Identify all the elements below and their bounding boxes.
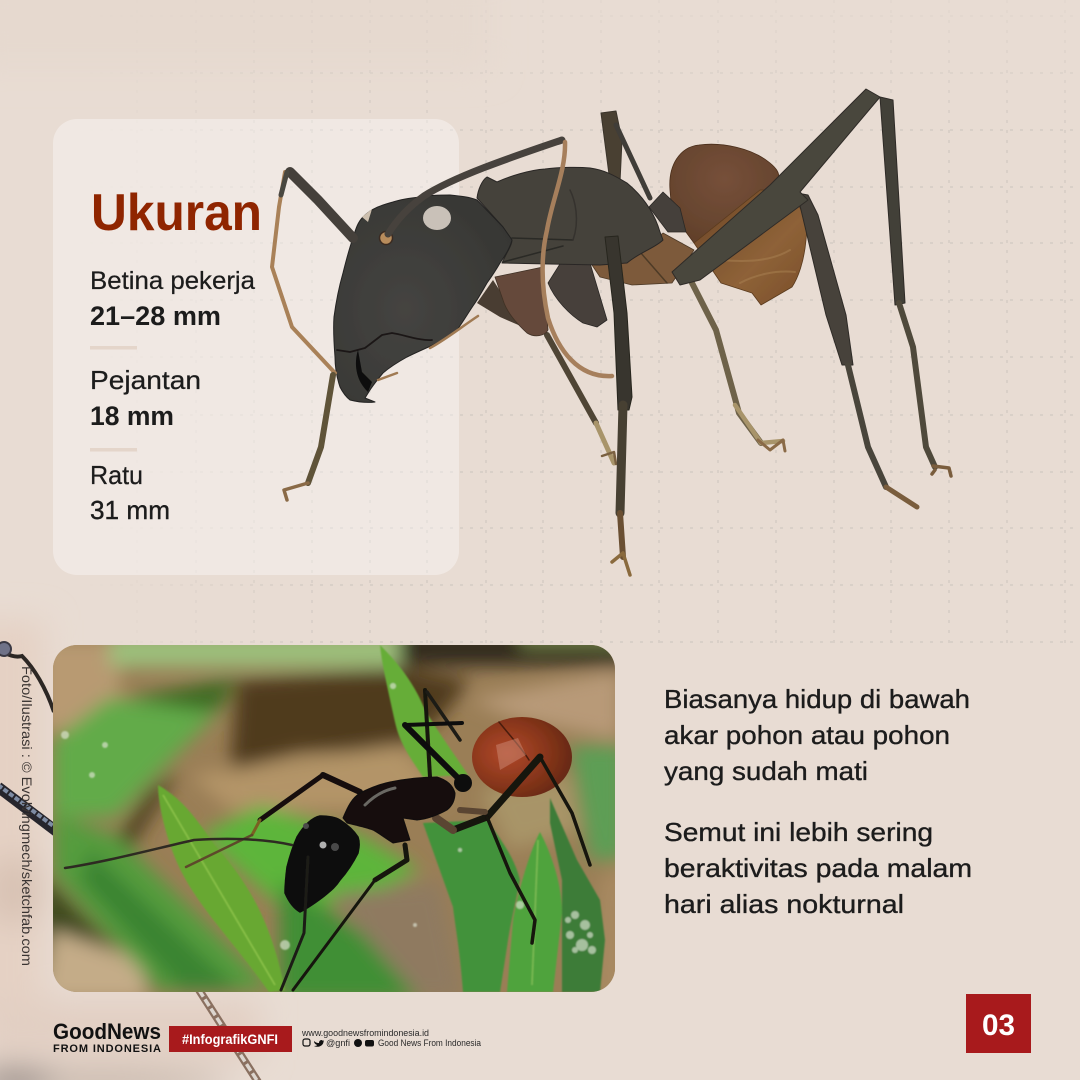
value: 31 mm: 31 mm: [90, 495, 170, 525]
front centre leg: [605, 236, 632, 410]
page number: [966, 994, 1031, 1053]
label: Ratu: Ratu: [90, 460, 143, 490]
label: Pejantan: Pejantan: [90, 365, 201, 395]
icon: twitter: [314, 1040, 324, 1047]
heading: Ukuran: Ukuran: [91, 184, 262, 242]
photographed ant: [65, 690, 590, 990]
antenna: [388, 140, 562, 234]
footer contacts: [301, 1028, 481, 1048]
icon: instagram: [303, 1039, 310, 1046]
icon: facebook: [354, 1039, 362, 1047]
value: 18 mm: 18 mm: [90, 401, 174, 431]
label: Betina pekerja: Betina pekerja: [90, 267, 255, 295]
grid: [190, 31, 1073, 643]
body text 1: [664, 684, 970, 786]
value: 21-28 mm: 21–28 mm: [90, 301, 221, 331]
body text 2: hari alias nokturnal: [664, 889, 904, 919]
icon: compound eye: [423, 206, 451, 230]
hashtag badge: [169, 1026, 292, 1052]
photo credit: Foto/Ilustrasi : © Evolvingmech/sketchfab.com: [19, 666, 35, 966]
body text 1: yang sudah mati: [664, 756, 868, 786]
body text 2: [664, 817, 972, 919]
rear legs: [880, 97, 905, 305]
logo: GoodNews From Indonesia: FROM INDONESIA: [53, 1043, 161, 1055]
body text 2: beraktivitas pada malam: [664, 853, 972, 883]
body text 1: Biasanya hidup di bawah: [664, 684, 970, 714]
icon: antenna socket: [380, 232, 392, 244]
logo: GoodNews From Indonesia: GoodNews: [53, 1019, 161, 1044]
footer contacts: Good News From Indonesia: [378, 1038, 481, 1048]
panel: ukuran: [53, 119, 459, 575]
head: [334, 195, 512, 402]
logo: GoodNews From Indonesia: [53, 1019, 161, 1055]
page number: 03: [982, 1009, 1015, 1042]
photo: ant on leaves: [53, 645, 615, 992]
body text 2: Semut ini lebih sering: [664, 817, 933, 847]
hashtag badge: #InfografikGNFI: [182, 1032, 278, 1047]
gaster: [670, 144, 779, 243]
body text 1: akar pohon atau pohon: [664, 720, 950, 750]
decorative: blurred antennae and stick: [0, 642, 258, 1080]
footer contacts: www.goodnewsfromindonesia.id: [301, 1028, 429, 1038]
footer contacts: @gnfi: [326, 1038, 350, 1048]
front left leg: [290, 172, 353, 238]
icon: youtube: [365, 1040, 374, 1046]
far legs: [692, 283, 761, 443]
coxa and femur under thorax: [477, 280, 523, 327]
thorax: [477, 167, 663, 265]
petiole: [649, 192, 686, 232]
illustration: ant specimen: [272, 89, 951, 575]
